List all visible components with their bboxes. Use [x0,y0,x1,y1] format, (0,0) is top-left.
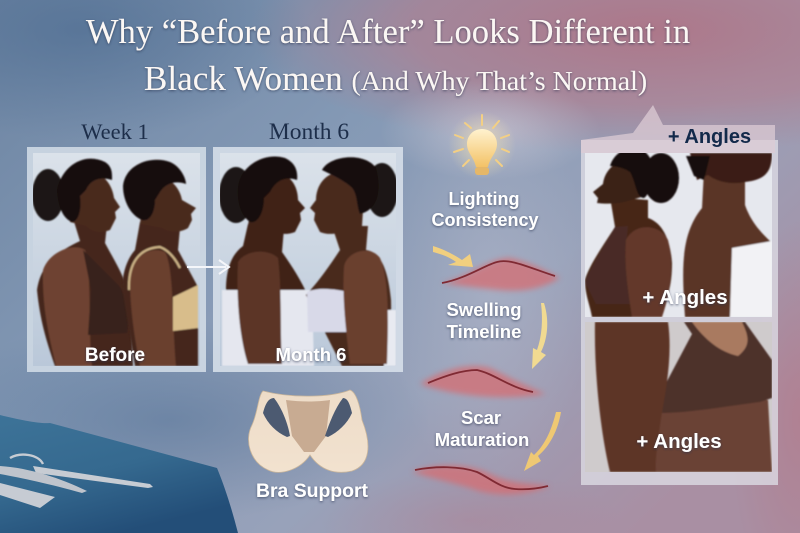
scar: third [412,465,550,494]
panel: before photo [27,147,206,372]
label: bra support: Bra Support [256,480,369,502]
label: lighting consistency [431,189,539,230]
scar: second [420,366,546,397]
scar: first [442,258,560,291]
figure: left woman, week 1 [32,159,133,366]
caption: before: Before [85,345,145,366]
title: Black Women (And Why That’s Normal) [144,59,647,98]
arrow: scar maturation [524,412,561,471]
label: scar maturation [435,407,529,450]
icon: light bulb [448,111,516,179]
inner back panel [286,400,330,452]
label: swelling timeline [446,299,522,342]
figure: profile view [585,148,679,317]
label: month 6: Month 6 [269,119,349,145]
panel: month 6 photo [187,147,403,372]
surgical table with drape [0,415,238,533]
label: swelling timeline: Swelling [446,299,522,320]
figure: left woman, month 6 [219,157,314,366]
strap opening right [325,398,352,437]
icon: forceps [0,466,87,493]
strap opening left [263,398,290,437]
icon: bra support garment [249,390,368,472]
arrow: swelling [532,303,547,369]
panel: angles, lower [585,322,772,472]
heading: angles: + Angles [668,126,751,148]
title: Why “Before and After” Looks Different in [86,13,690,51]
caption: angles: + Angles [636,430,722,453]
heading: angles [581,105,775,153]
caption: angles: + Angles [642,286,728,309]
label: swelling timeline: Timeline [447,321,521,342]
icon: scissors [10,455,153,488]
caption: month 6: Month 6 [276,344,346,365]
figure: side view with support garment [595,322,772,472]
panel: angles, upper [585,148,772,317]
label: scar maturation: Scar [461,407,501,428]
figure: right woman, month 6 [306,157,398,366]
icon: scalpel blade [0,483,55,508]
arrow: before to after [187,260,229,274]
label: lighting consistency: Lighting [449,189,519,209]
figure: back view [683,153,772,317]
label: lighting consistency: Consistency [431,210,539,230]
figure: right woman, week 1 [122,160,198,366]
panel: angles, outer frame [581,140,778,485]
title [86,13,690,98]
arrow: lighting to scar [433,246,473,267]
label: week 1: Week 1 [81,119,149,144]
label: scar maturation: Maturation [435,429,529,450]
